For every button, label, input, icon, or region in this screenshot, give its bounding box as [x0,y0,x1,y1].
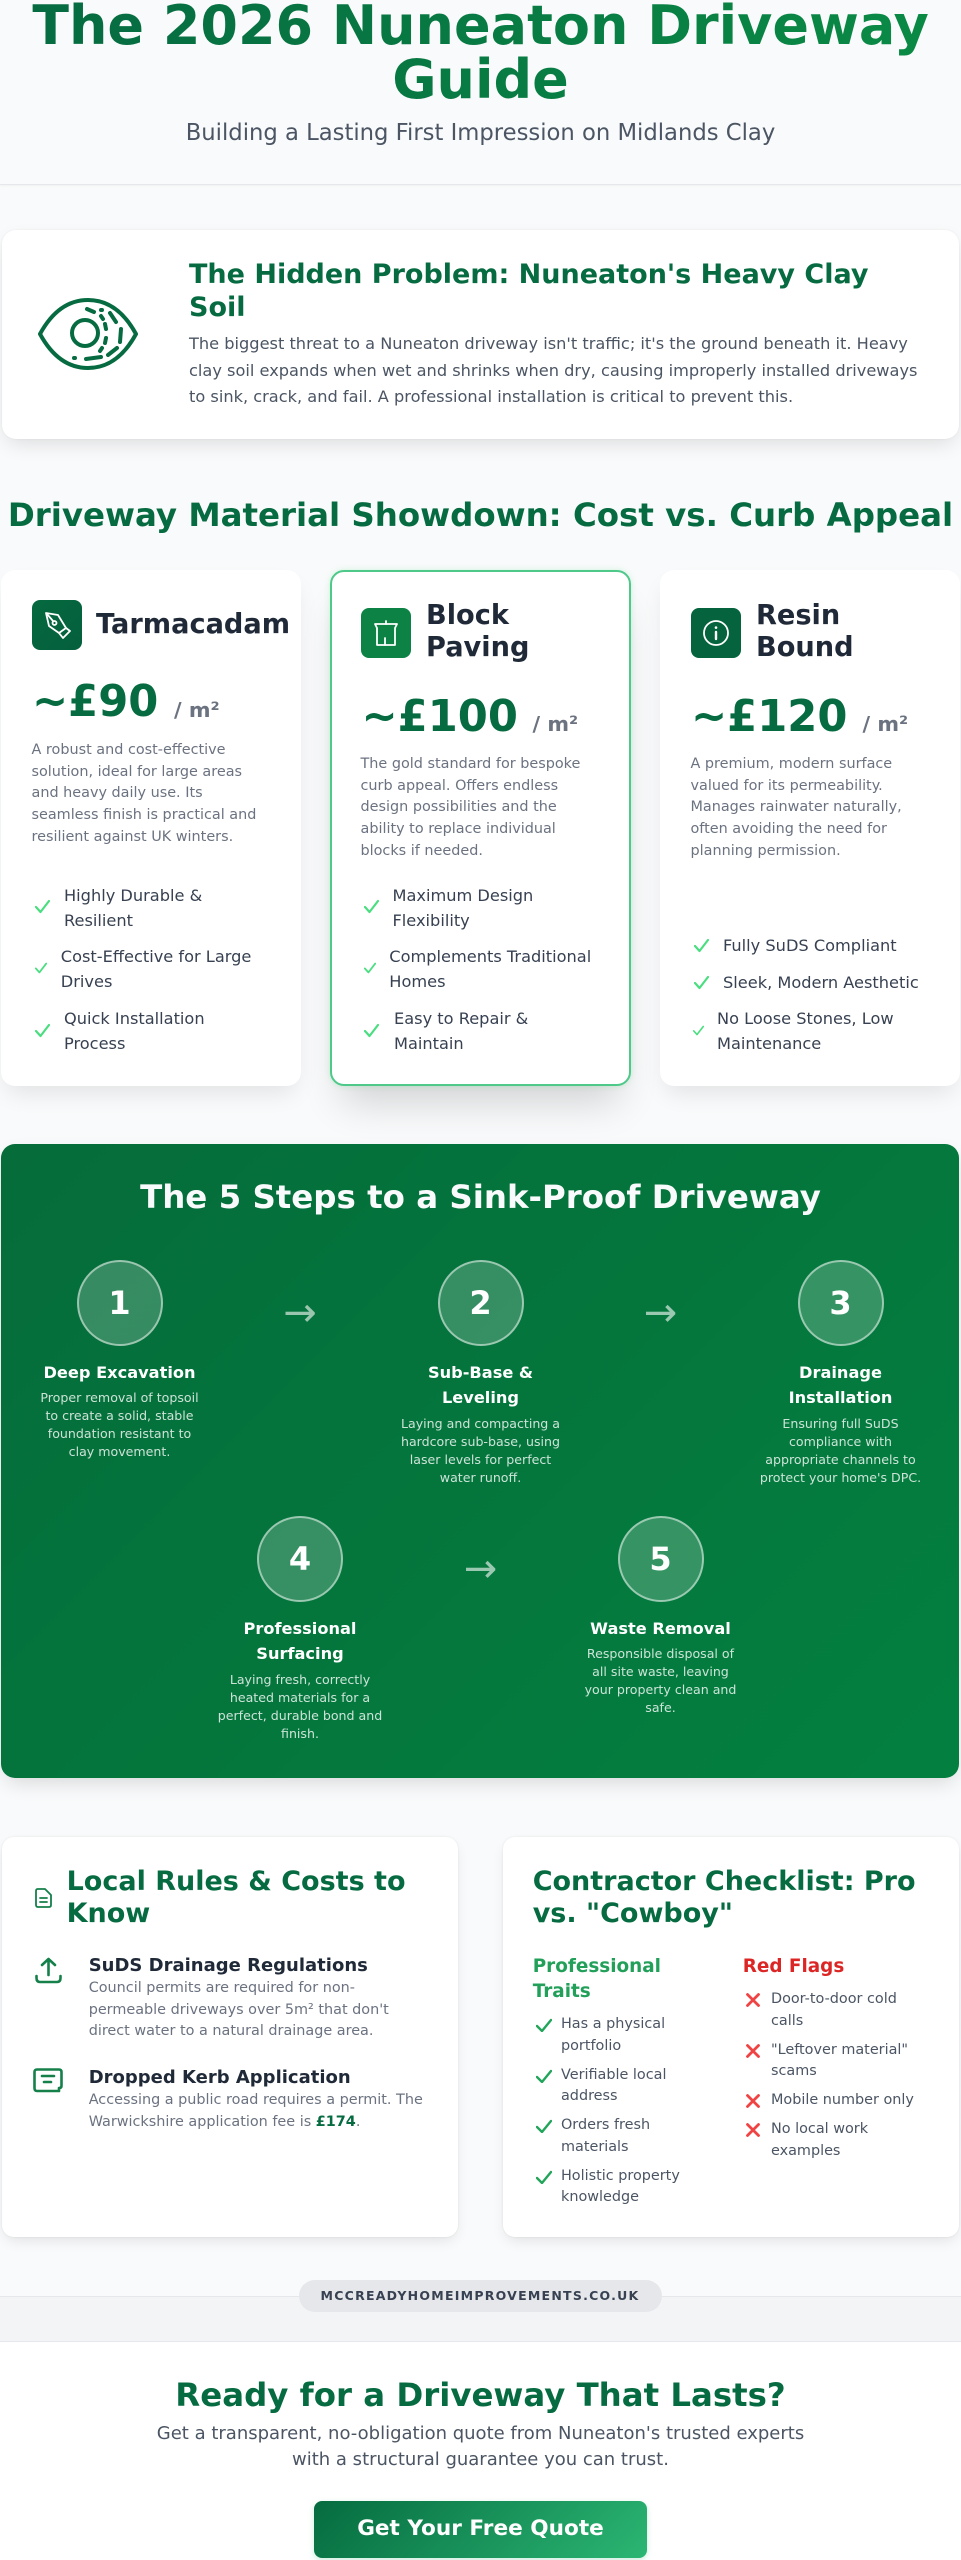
flag text: calls [771,2013,803,2029]
description: solution, ideal for large areas [32,764,242,780]
step 3 number: 3 [829,1284,852,1322]
feature text: Sleek, Modern Aesthetic [723,972,919,992]
cta text: Get a transparent, no-obligation quote from Nuneaton's trusted experts [157,2423,804,2444]
description: ability to replace individual [360,821,556,837]
feature 2 [35,947,251,991]
column heading: Professional [533,1956,661,1977]
step 1 text: Proper removal of topsoil [40,1390,199,1405]
feature text: Cost-Effective for Large [61,947,251,966]
problem text [188,334,917,406]
description [360,756,580,859]
feature text: Process [64,1034,125,1053]
rule text [89,2090,423,2133]
step 1 title: Deep Excavation [43,1363,196,1382]
step 4 text: Laying fresh, correctly [230,1672,370,1686]
icon: upload [35,1957,62,1984]
feature text: Quick Installation [64,1009,205,1028]
rule text: direct water to a natural drainage area. [89,2023,373,2039]
step 1 text: clay movement. [69,1444,170,1459]
step 4 title: Professional [244,1619,356,1638]
flag 2 [743,2040,943,2084]
card title: Resin [756,600,840,631]
website pill: MCCREADYHOMEIMPROVEMENTS.CO.UK [321,2288,639,2303]
cross [746,1993,760,2007]
step 5 text: Responsible disposal of [587,1646,734,1661]
feature text [389,947,591,991]
step 1 text [40,1390,199,1459]
step 3 title [789,1363,892,1407]
description: A premium, modern surface [690,756,892,772]
website pill [298,2280,662,2312]
description [32,742,256,845]
check [536,2170,552,2184]
step 4 text [218,1670,382,1742]
feature 3 [364,1009,528,1053]
trait 1 [533,2014,723,2058]
feature text: Maintenance [717,1034,821,1053]
icon: kerb [33,2068,63,2093]
check [694,976,709,990]
title [32,0,929,107]
feature text: Complements Traditional [389,947,591,966]
subtitle: Building a Lasting First Impression on Midlands Clay [186,120,775,146]
step 3 text: compliance with [789,1434,892,1448]
description: The gold standard for bespoke [360,756,580,772]
feature text [64,886,202,930]
check [693,1026,704,1036]
feature text: Drives [61,972,112,991]
description: A robust and cost-effective [32,742,226,758]
flag text: scams [771,2063,817,2079]
feature text: Easy to Repair & [394,1009,528,1028]
description: planning permission. [690,843,841,859]
trait text: address [561,2088,618,2104]
rule text: Accessing a public road requires a permit. The [89,2092,423,2108]
card title: Paving [426,632,529,663]
step 2 title [428,1363,533,1407]
feature text [392,886,533,930]
step 5 title: Waste Removal [590,1619,731,1638]
unit: / m² [532,712,578,736]
icon: info [690,608,740,658]
flag text: examples [771,2143,840,2159]
step 4 number [257,1516,343,1602]
description: curb appeal. Offers endless [360,778,558,794]
column heading [533,1954,661,2005]
feature 1 [35,886,202,930]
step 3 text: protect your home's DPC. [760,1470,921,1484]
cta heading: Ready for a Driveway That Lasts? [175,2376,786,2414]
header [0,0,961,185]
step 2 [401,1260,560,1484]
feature 1 [364,886,533,930]
trait text [561,2064,666,2108]
cta text [157,2421,804,2472]
steps heading: The 5 Steps to a Sink-Proof Driveway [140,1178,821,1216]
rule title: Dropped Kerb Application [89,2067,351,2088]
card title: Tarmacadam [96,609,290,640]
feature text: Homes [389,972,446,991]
check [694,938,709,952]
step 4 text: heated materials for a [230,1690,370,1704]
card title [426,600,529,663]
rule: kerb [33,2066,435,2136]
arrow: → [283,1290,317,1336]
price: ~£120 [691,692,847,742]
column: red flags [743,1954,943,2164]
rule text [89,1978,389,2043]
trait text: Orders fresh [561,2117,650,2133]
trait 2 [533,2064,723,2108]
flag text: Door-to-door cold [771,1991,897,2007]
panel: tarmacadam [1,570,301,1086]
arrow: → [644,1290,677,1336]
check [364,900,379,914]
problem heading: The Hidden Problem: Nuneaton's Heavy Clay [189,259,868,290]
step 1 text: to create a solid, stable [45,1408,194,1423]
arrow: → [464,1546,497,1592]
cross [746,2094,760,2108]
step 2 text: hardcore sub-base, using [401,1434,560,1448]
feature text: Maximum Design [392,886,533,905]
step 1 [40,1260,199,1459]
feature text [394,1009,528,1053]
feature 2 [694,972,919,992]
trait text [561,2115,650,2158]
step 5 text: safe. [645,1700,676,1715]
step 1 text: foundation resistant to [48,1426,191,1441]
cross [746,2123,760,2137]
card title: Block [426,600,509,631]
step 3 title: Drainage [799,1363,882,1382]
title: Guide [392,48,569,111]
cta button [314,2501,647,2558]
description: resilient against UK winters. [32,829,233,845]
feature text: Maintain [394,1034,464,1053]
trait text [561,2166,680,2209]
cross [746,2044,760,2058]
panel: resin bound [660,570,960,1086]
step 1 number [76,1260,162,1346]
feature text: Resilient [64,911,133,930]
flag text [771,2040,908,2083]
flag text: Mobile number only [771,2092,914,2108]
description: blocks if needed. [360,843,483,859]
feature text: Highly Durable & [64,886,202,905]
step 4 number: 4 [289,1540,311,1578]
trait text: materials [561,2139,629,2155]
cta button: Get Your Free Quote [357,2516,604,2541]
description: Manages rainwater naturally, [690,799,902,815]
panel: local rules [2,1837,458,2237]
card title [756,600,854,663]
flag 1 [743,1989,943,2033]
step 5 [572,1515,749,1720]
description: valued for its permeability. [690,778,883,794]
step 2 text: Laying and compacting a [401,1416,560,1430]
cta section [0,2342,961,2560]
description: often avoiding the need for [690,821,887,837]
section heading: Driveway Material Showdown: Cost vs. Curb Appeal [8,496,953,534]
step 5 text: all site waste, leaving [592,1664,729,1679]
check [536,2119,552,2133]
unit: / m² [174,698,220,722]
feature text [61,947,251,991]
step 3 number [798,1260,884,1346]
flag text [771,2119,868,2162]
step 2 number [438,1260,524,1346]
check [35,962,47,974]
column heading: Traits [533,1981,591,2002]
feature text: Fully SuDS Compliant [723,936,897,955]
step 5 number: 5 [649,1540,672,1578]
rule title: SuDS Drainage Regulations [89,1955,368,1976]
trait text: portfolio [561,2038,621,2054]
step 3 [760,1260,921,1484]
step 2 text [401,1416,560,1484]
flag text: "Leftover material" [771,2042,908,2058]
feature text [64,1009,205,1053]
price: ~£100 [362,692,518,742]
step 1 number: 1 [108,1284,131,1322]
panel: block paving [330,570,631,1086]
step 2 number: 2 [469,1284,492,1322]
check [536,2068,552,2082]
icon: bucket [360,608,410,658]
icon: pen [32,600,82,650]
step 2 text: water runoff. [440,1470,521,1484]
cta text: with a structural guarantee you can trust. [292,2449,669,2470]
checklist heading: vs. "Cowboy" [533,1898,733,1929]
check [35,900,50,914]
description: design possibilities and the [360,799,557,815]
icon: eye [38,298,138,370]
panel: hidden problem [2,230,959,439]
feature 1 [694,936,897,955]
feature text: No Loose Stones, Low [717,1009,894,1028]
flag text [771,1989,897,2032]
trait text: Has a physical [561,2016,665,2032]
trait text: Verifiable local [561,2066,666,2082]
flag 4 [743,2119,943,2163]
step 2 title: Sub-Base & [428,1363,533,1382]
footer band [0,2296,961,2342]
problem heading [189,259,868,322]
description: and heavy daily use. Its [32,785,203,801]
step 2 title: Leveling [442,1388,519,1407]
trait 4 [533,2166,723,2210]
rules heading: Local Rules & Costs to [67,1866,406,1897]
step 5 text [585,1645,736,1717]
panel: 5 steps [1,1144,959,1778]
step 5 text: your property clean and [585,1682,736,1697]
price: ~£90 [32,677,158,727]
problem text: The biggest threat to a Nuneaton driveway isn't traffic; it's the ground beneath it. Heavy [189,334,908,353]
problem text: clay soil expands when wet and shrinks when dry, causing improperly installed driveways [189,361,917,380]
checklist heading: Contractor Checklist: Pro [533,1866,916,1897]
step 4 text: perfect, durable bond and [218,1708,382,1722]
rule: suds [35,1954,435,2044]
flag 3 [743,2090,943,2112]
step 3 title: Installation [789,1388,892,1407]
problem heading: Soil [189,292,246,322]
feature 2 [364,947,591,991]
step 5 number [618,1516,704,1602]
trait text [561,2014,665,2057]
check [364,962,376,974]
step 3 text: Ensuring full SuDS [782,1416,899,1430]
step 3 text: appropriate channels to [765,1452,916,1466]
step 2 text: laser levels for perfect [410,1452,551,1466]
trait 3 [533,2115,723,2159]
rule text: permeable driveways over 5m² that don't [89,2002,389,2018]
step 4 title [244,1616,356,1667]
rule text: Council permits are required for non- [89,1980,355,1996]
problem text: to sink, crack, and fail. A professional installation is critical to prevent this. [189,387,793,406]
checklist heading [533,1866,916,1930]
rule text: Warwickshire application fee is £174. [89,2114,360,2130]
step 3 text [760,1414,921,1486]
step 4 [212,1515,388,1750]
check [364,1024,379,1038]
step 4 title: Surfacing [256,1644,344,1663]
trait text: knowledge [561,2189,639,2205]
card title: Bound [756,632,854,663]
unit: / m² [862,712,908,736]
feature 3 [693,1009,894,1053]
column: professional traits [533,1954,723,2204]
column heading: Red Flags [743,1956,844,1977]
rules heading: Know [67,1898,150,1929]
description: seamless finish is practical and [32,807,256,823]
feature 3 [35,1009,205,1053]
feature text [717,1009,894,1053]
description [690,756,902,859]
trait text: Holistic property [561,2168,680,2184]
icon: document [35,1888,52,1908]
step 4 text: finish. [281,1726,319,1740]
panel: contractor checklist [503,1837,959,2237]
feature text: Flexibility [392,911,470,930]
check [35,1024,50,1038]
check [536,2018,552,2032]
rules heading [67,1866,406,1930]
flag text: No local work [771,2121,868,2137]
